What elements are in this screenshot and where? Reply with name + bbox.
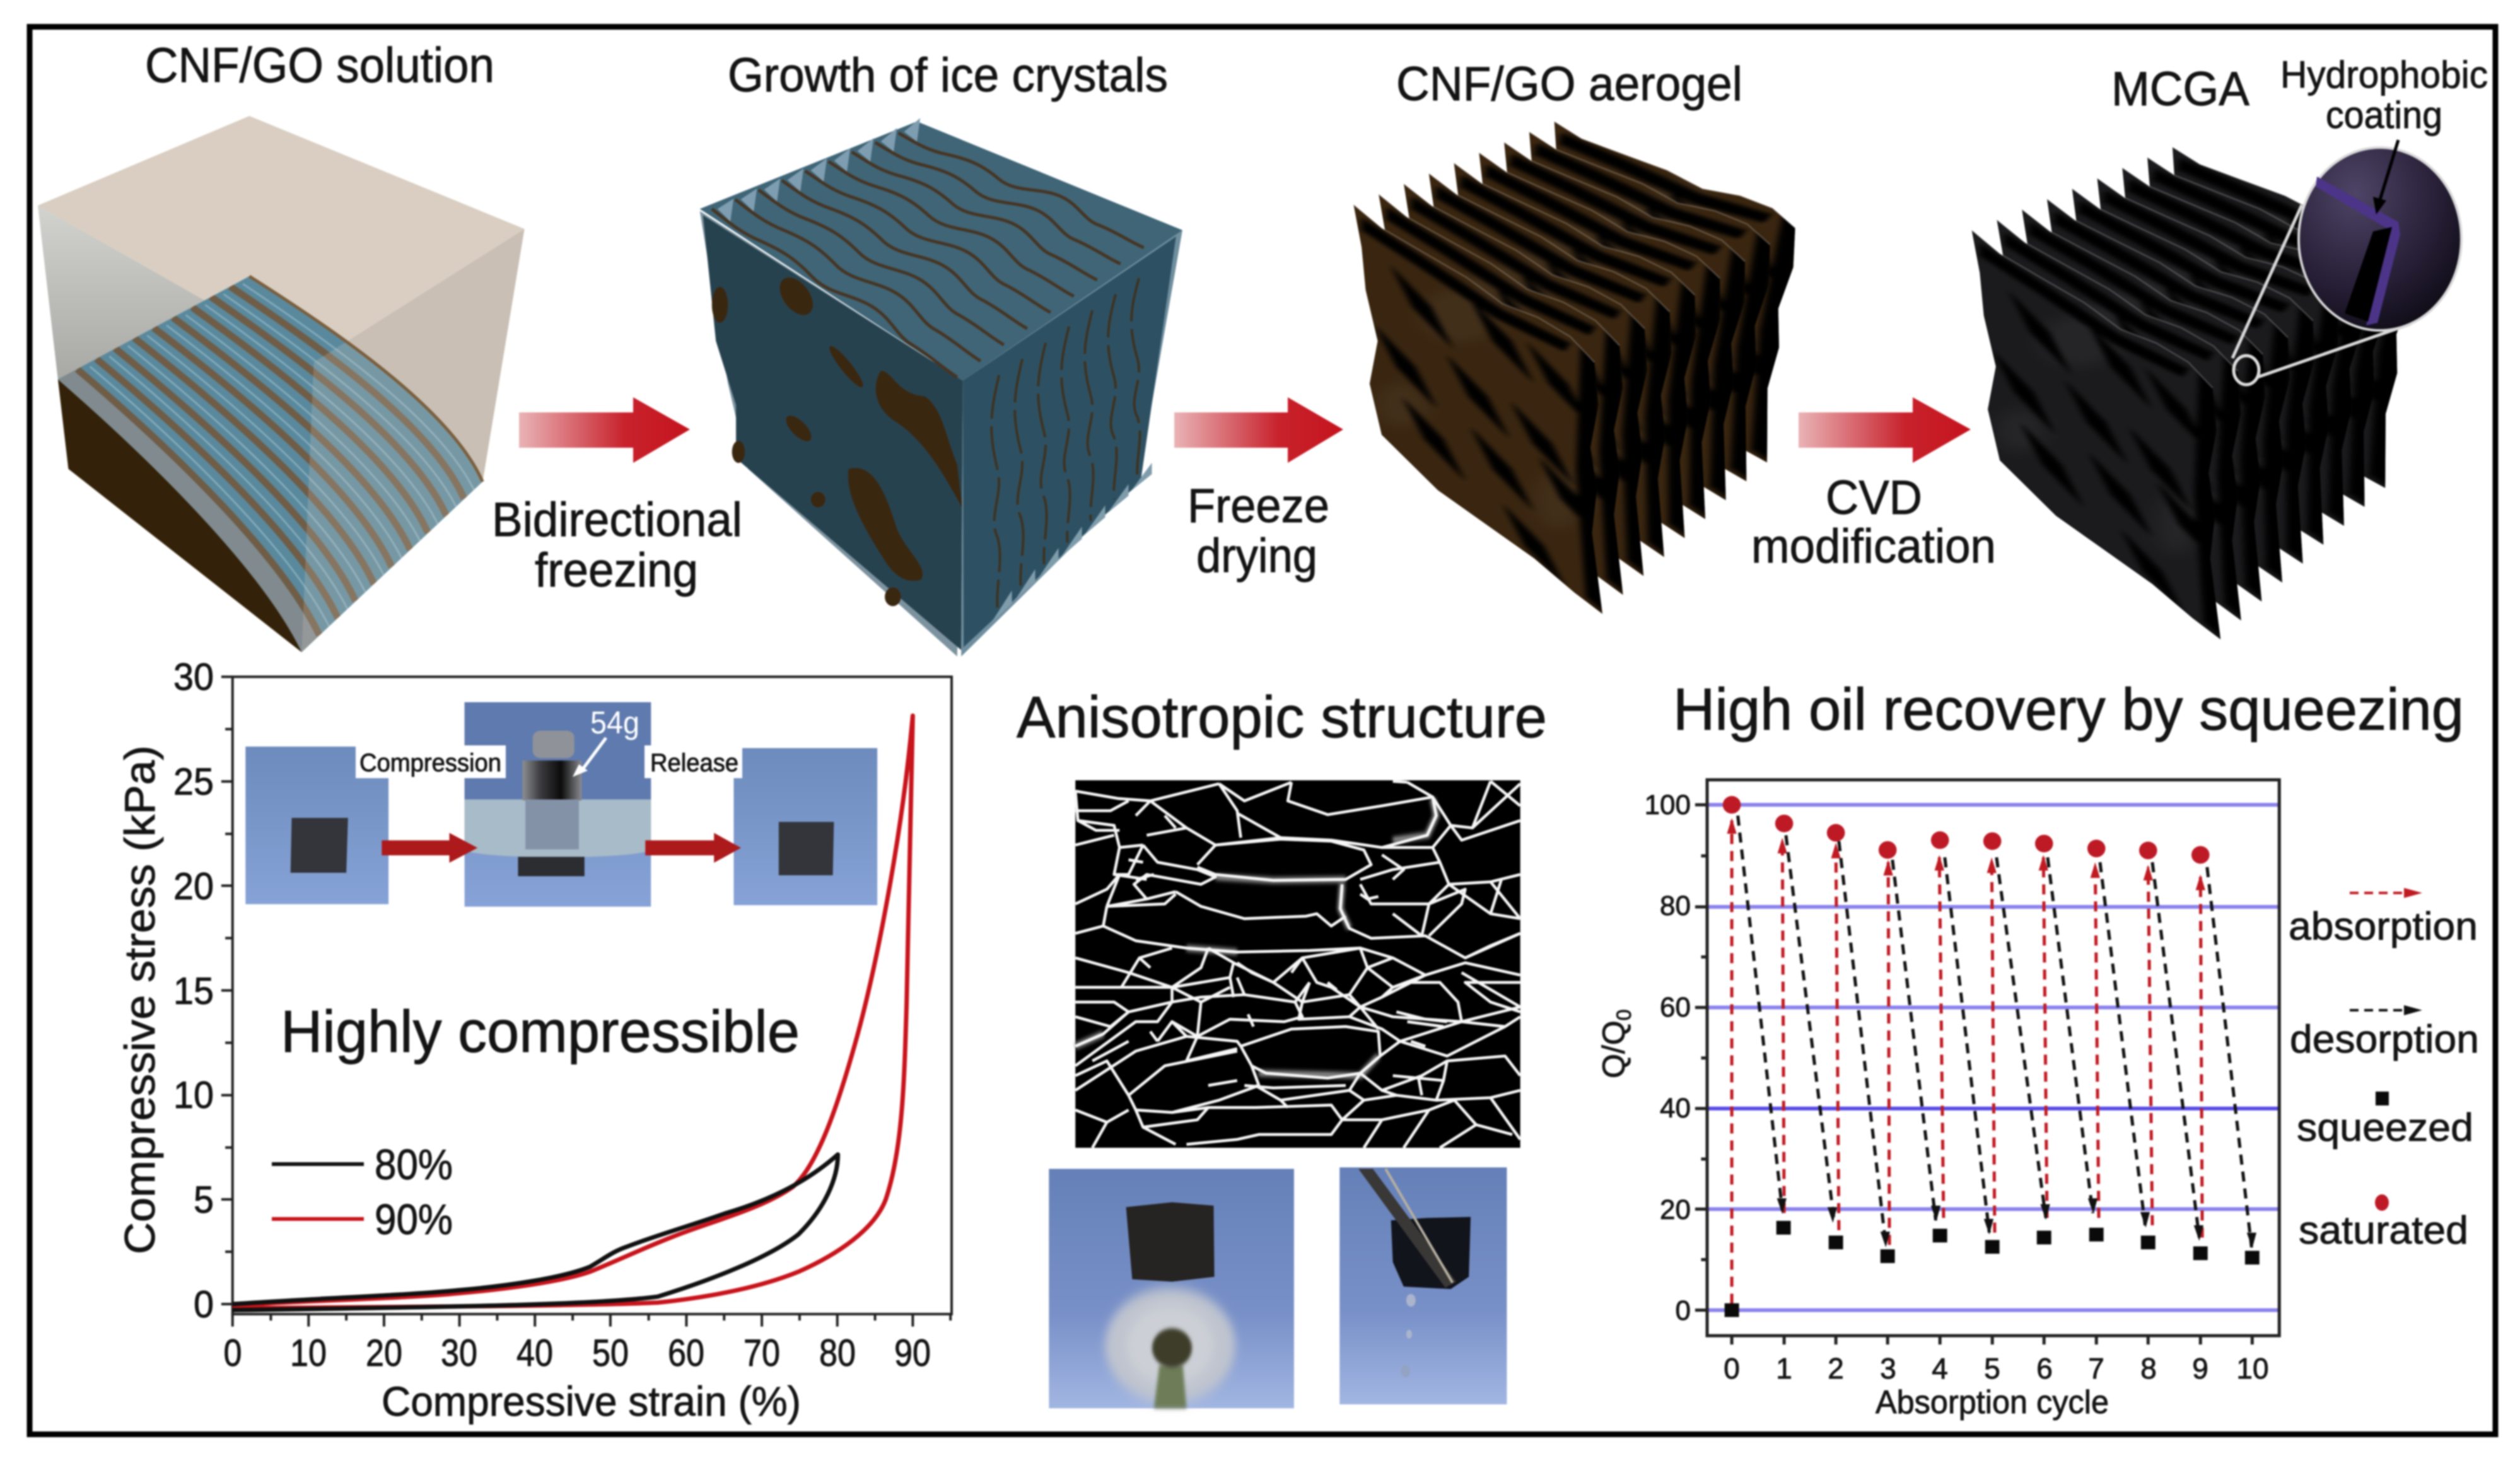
y tick labels: 5 <box>194 1179 214 1221</box>
x tick labels: 0 <box>1724 1352 1740 1385</box>
chart axes <box>221 677 952 1327</box>
SEM micrograph <box>1075 780 1520 1148</box>
curve: 80% black loop <box>233 1155 838 1310</box>
label: Hydrophobic coating <box>2280 54 2488 136</box>
panel: stress-strain chart <box>116 656 952 1425</box>
x tick labels: 50 <box>592 1332 629 1374</box>
legend: absorption <box>2289 888 2478 948</box>
label: Hydrophobic coating: Hydrophobic <box>2280 54 2488 96</box>
y tick labels: 30 <box>173 656 214 698</box>
panel: High oil recovery by squeezing <box>1596 676 2479 1421</box>
squeezed points <box>1725 1221 2260 1317</box>
legend <box>272 1141 453 1244</box>
heading: CNF/GO aerogel: CNF/GO aerogel <box>1396 57 1742 111</box>
label: Compression: Compression <box>359 749 501 777</box>
illustration: black MCGA sheets <box>1972 104 2448 639</box>
arrow: compression <box>382 833 477 863</box>
x tick labels: 2 <box>1828 1352 1844 1385</box>
x tick labels: 10 <box>290 1332 327 1374</box>
curve: 90% red loop <box>233 716 913 1308</box>
y tick labels: 15 <box>173 970 214 1012</box>
y tick labels: 60 <box>1660 992 1691 1023</box>
black arrowheads <box>1777 1198 2256 1249</box>
callout: magnified hydrophobic coating <box>2232 140 2461 385</box>
label: CVD modification <box>1751 471 1996 573</box>
plot frame and ticks <box>1695 780 2279 1344</box>
legend: squeezed: squeezed <box>2297 1106 2473 1150</box>
panel: CNF/GO aerogel <box>1353 57 1829 614</box>
label: Bidirectional freezing: Bidirectional <box>492 493 742 547</box>
y tick labels: 0 <box>1676 1295 1691 1326</box>
heading: High oil recovery by squeezing: High oil recovery by squeezing <box>1673 676 2464 742</box>
panel: MCGA <box>1972 54 2488 639</box>
x tick labels: 0 <box>223 1332 242 1374</box>
panel: Growth of ice crystals <box>700 49 1182 656</box>
photo: after release <box>733 748 877 905</box>
x axis title: Absorption cycle <box>1875 1384 2109 1421</box>
arrow: pointing at weight <box>573 738 606 777</box>
panel: Anisotropic structure <box>1017 684 1547 1408</box>
chart: cycle plot <box>1695 780 2279 1344</box>
label: CVD modification: CVD <box>1826 471 1922 525</box>
legend: 90% <box>375 1196 453 1244</box>
x tick labels: 6 <box>2036 1352 2053 1385</box>
x tick labels: 1 <box>1776 1352 1792 1385</box>
black dashed desorption arrows <box>1738 815 2251 1247</box>
x tick labels: 10 <box>2236 1352 2269 1385</box>
label: Freeze drying: Freeze <box>1187 479 1329 533</box>
panel: CNF/GO solution <box>38 37 525 652</box>
label: Bidirectional freezing: freezing <box>535 544 698 597</box>
x tick labels: 4 <box>1932 1352 1948 1385</box>
y tick labels: 0 <box>194 1283 214 1326</box>
label: Hydrophobic coating: coating <box>2326 94 2442 136</box>
saturated points <box>1723 796 2210 864</box>
y tick labels: 80 <box>1660 890 1691 921</box>
y tick labels: 40 <box>1660 1093 1691 1124</box>
y tick labels: 20 <box>1660 1194 1691 1225</box>
photo: before compression <box>245 747 388 904</box>
label: Freeze drying: drying <box>1196 529 1317 583</box>
label: CVD modification: modification <box>1751 520 1996 573</box>
x tick labels: 3 <box>1880 1352 1896 1385</box>
x tick labels: 40 <box>516 1332 553 1374</box>
illustration: solution cube with freezing front <box>38 116 525 652</box>
x tick labels: 8 <box>2140 1352 2157 1385</box>
y axis title: Q/Q <box>1596 1020 1631 1078</box>
legend: saturated: saturated <box>2299 1209 2468 1252</box>
legend: desorption: desorption <box>2290 1018 2479 1061</box>
x tick labels: 80 <box>819 1332 856 1374</box>
x tick labels <box>1724 1352 2269 1385</box>
label: 54g: 54g <box>590 705 639 740</box>
x tick labels: 90 <box>894 1332 931 1374</box>
red arrowheads <box>1727 818 2205 890</box>
x tick labels: 60 <box>668 1332 704 1374</box>
y tick labels: 10 <box>173 1074 214 1116</box>
legend: 80% <box>375 1141 453 1189</box>
arrow: bidirectional freezing <box>519 397 690 463</box>
y tick labels: 25 <box>173 761 214 803</box>
x tick labels: 9 <box>2192 1352 2208 1385</box>
y tick labels <box>1645 790 1691 1326</box>
heading: Growth of ice crystals: Growth of ice crystals <box>728 49 1168 102</box>
label: Freeze drying <box>1187 479 1329 583</box>
x tick labels: 20 <box>366 1332 402 1374</box>
x axis title: Compressive strain (%) <box>382 1378 801 1425</box>
gridlines <box>1707 805 2279 1310</box>
photo: aerogel on dandelion <box>1049 1169 1294 1408</box>
inset: compression photos <box>245 702 877 907</box>
label: Release: Release <box>650 749 738 777</box>
x tick labels: 70 <box>744 1332 780 1374</box>
y tick labels: 100 <box>1645 790 1691 820</box>
heading: MCGA: MCGA <box>2111 62 2249 116</box>
y axis title: 0 <box>1613 1010 1635 1020</box>
label: Bidirectional freezing <box>492 493 742 597</box>
heading: CNF/GO solution: CNF/GO solution <box>145 37 494 93</box>
y tick labels <box>173 656 214 1326</box>
arrow: CVD modification <box>1799 397 1971 463</box>
photo: oil dripping from squeezed aerogel <box>1339 1167 1507 1404</box>
text: Highly compressible: Highly compressible <box>281 998 800 1064</box>
illustration: ice crystal cube <box>700 69 1182 656</box>
arrow: coating pointer <box>2373 140 2398 214</box>
arrow: release <box>645 833 741 863</box>
y tick labels: 20 <box>173 865 214 907</box>
x tick labels: 5 <box>1984 1352 2000 1385</box>
illustration: brown aerogel sheets <box>1353 78 1829 614</box>
x tick labels <box>223 1332 931 1374</box>
arrow: freeze drying <box>1174 397 1343 463</box>
y axis title: Compressive stress (kPa) <box>116 745 164 1254</box>
legend: absorption: absorption <box>2289 905 2478 948</box>
red dashed absorption arrows <box>1732 820 2202 1304</box>
heading: Anisotropic structure: Anisotropic structure <box>1017 684 1547 750</box>
x tick labels: 7 <box>2088 1352 2104 1385</box>
photo: under 54 g weight <box>465 702 651 907</box>
x tick labels: 30 <box>441 1332 477 1374</box>
